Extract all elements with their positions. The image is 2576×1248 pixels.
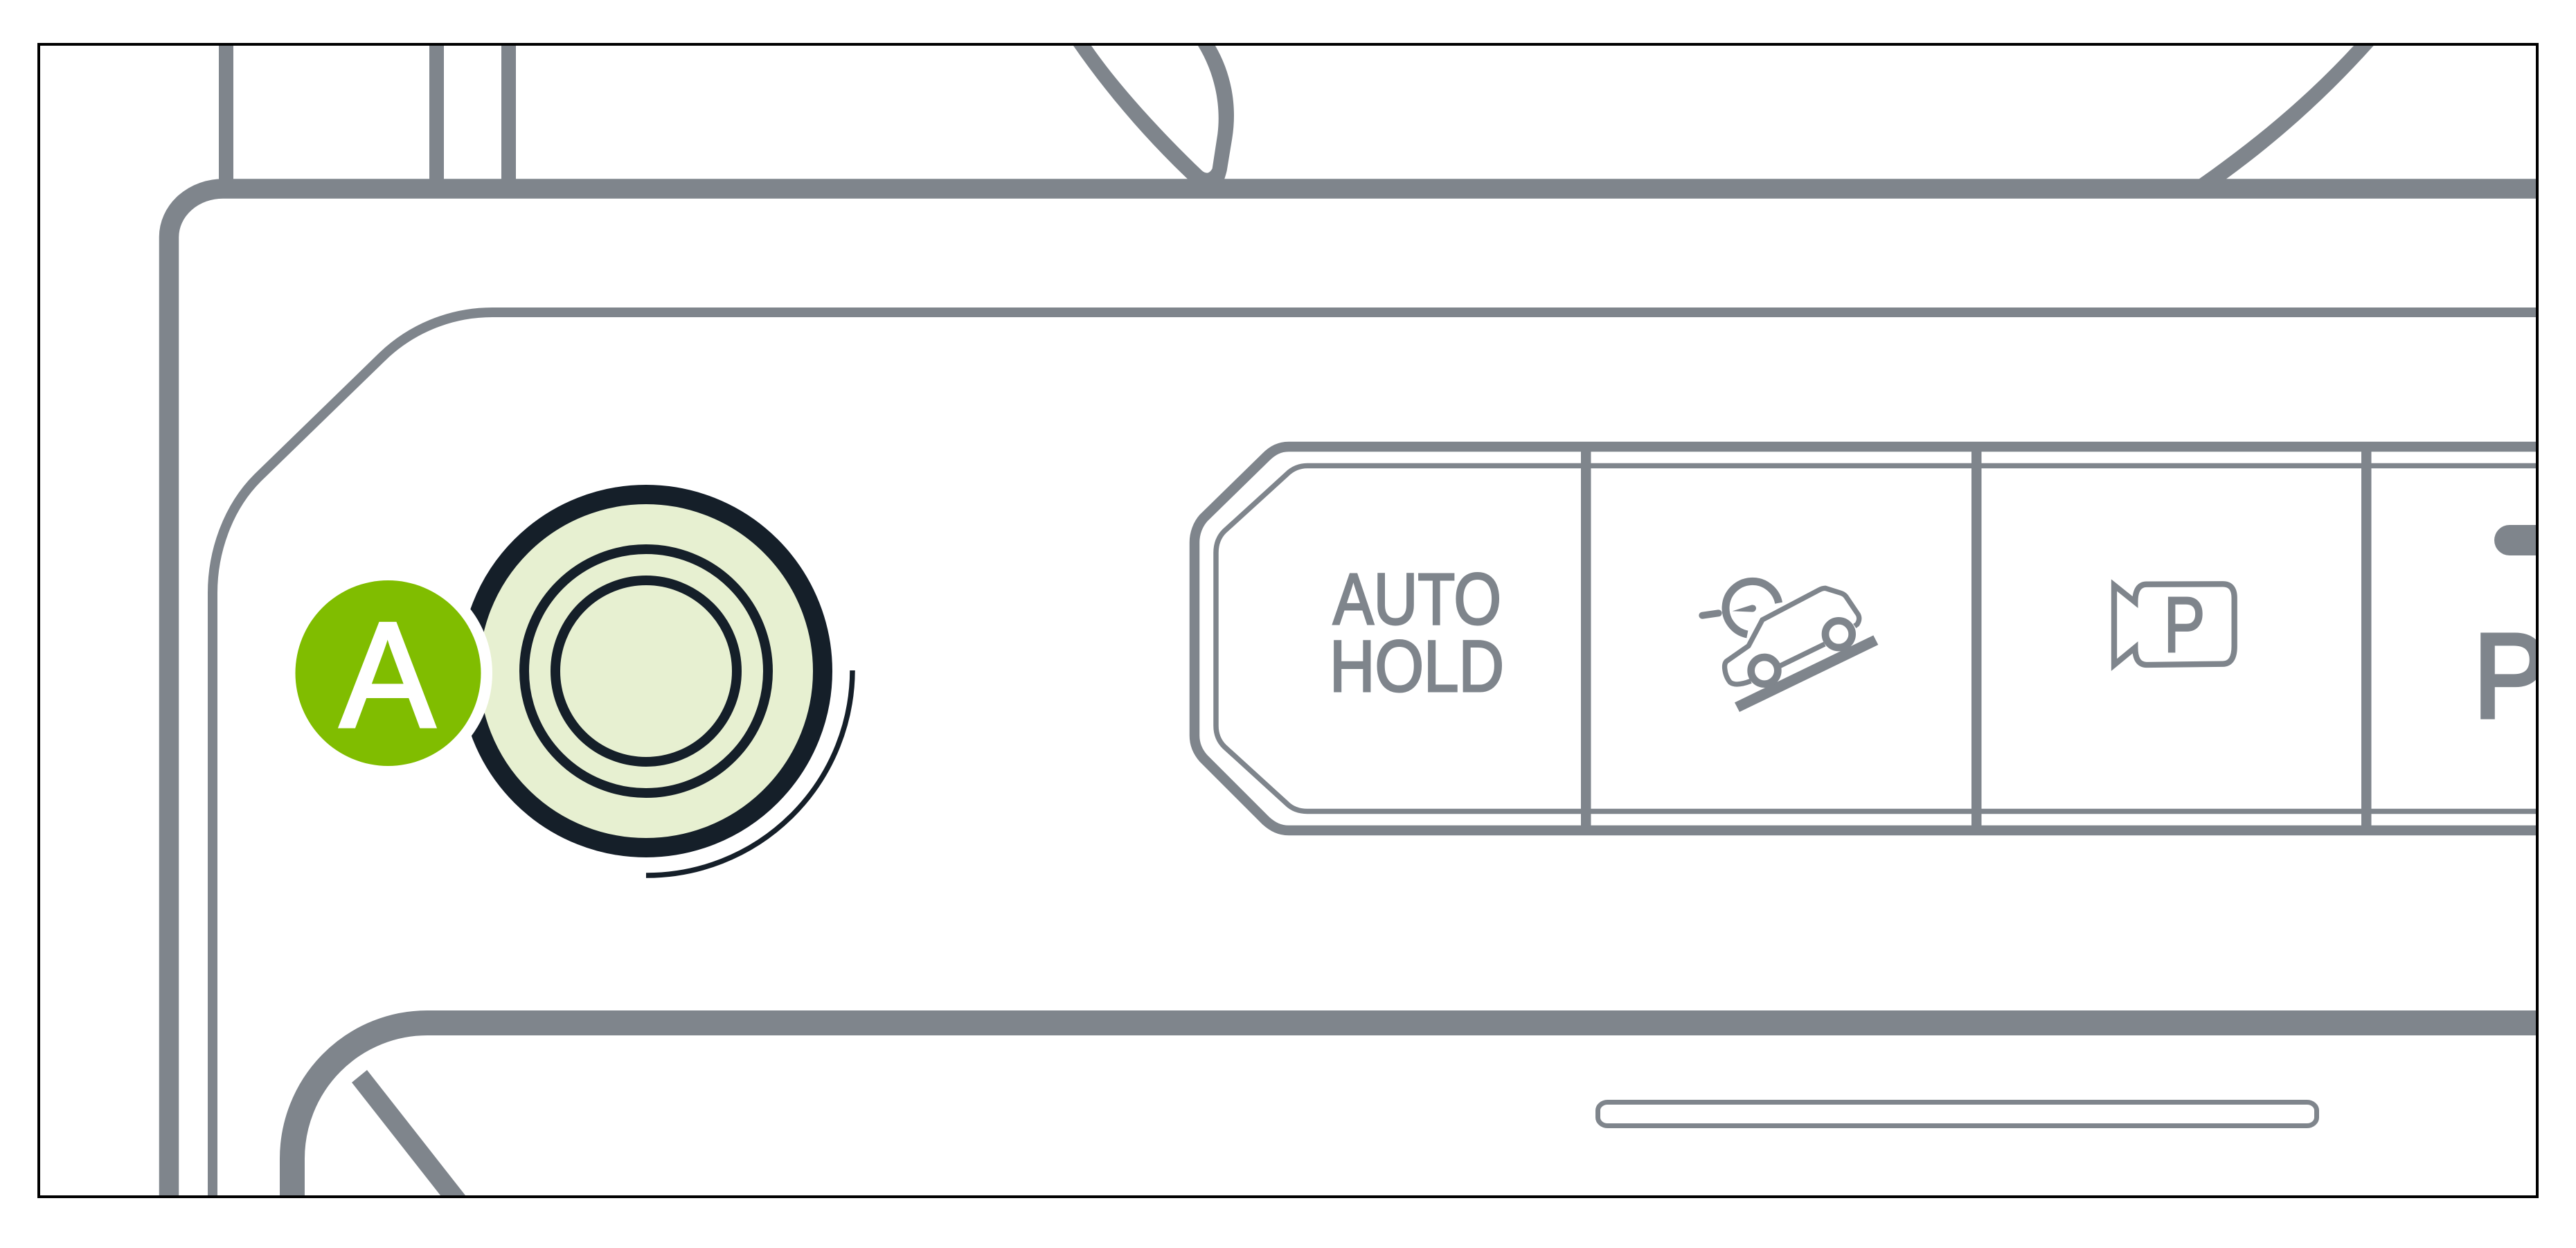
motion arc — [646, 670, 852, 875]
panel inner outline — [213, 312, 2548, 1205]
highlighted round button — [469, 494, 852, 875]
lower bay outline — [292, 1023, 2548, 1205]
button label: AUTO HOLD: HOLD — [1330, 626, 1504, 707]
button label: AUTO HOLD — [1332, 572, 1502, 693]
icon: parking camera: P — [2164, 581, 2205, 668]
storage slot — [1598, 1103, 2317, 1126]
button inner ring — [555, 580, 737, 762]
icon: parking camera — [2114, 581, 2235, 668]
fourth button: pill and P symbol: P — [2474, 609, 2548, 743]
icon: hill descent car with gauge — [1702, 581, 1878, 712]
badge halo — [283, 569, 492, 778]
badge letter: A — [340, 591, 435, 758]
button outer ring and fill — [469, 494, 823, 848]
button dividers — [1581, 450, 2371, 828]
upper left curved band — [1073, 46, 1234, 180]
top vertical bars — [219, 42, 516, 187]
button bank outer outline — [1195, 447, 2548, 830]
lower diagonal strut — [352, 1070, 465, 1195]
console outer frame — [169, 188, 2548, 1205]
badge disc — [295, 580, 481, 766]
button bank inner outline — [1216, 465, 2548, 812]
callout badge A — [283, 569, 492, 778]
upper right curved band — [2197, 46, 2374, 180]
button middle ring — [524, 549, 768, 793]
button label: AUTO HOLD: AUTO — [1333, 559, 1501, 640]
fourth button: pill and P symbol — [2480, 525, 2536, 719]
